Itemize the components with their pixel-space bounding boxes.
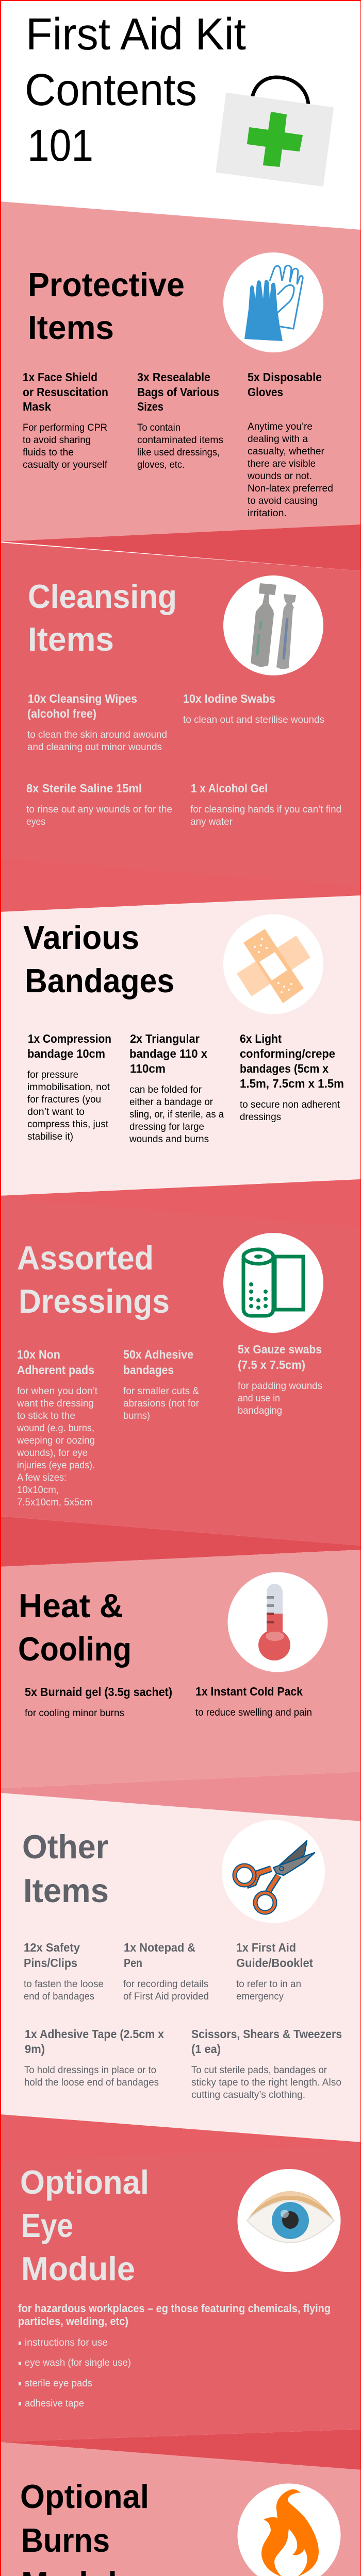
- heading: optional burns module: [20, 2478, 149, 2576]
- item: conforming bandages: 6x Light: [240, 1032, 282, 1045]
- item: face shield: fluids to the: [23, 447, 74, 458]
- list: eye module contents: instructions for use: [25, 2337, 108, 2348]
- item: notepad and pen: [123, 1941, 209, 2002]
- item: adhesive bandages: burns): [123, 1411, 150, 1421]
- heading: cleansing items: Cleansing: [28, 578, 177, 615]
- heading: other items: Items: [23, 1872, 109, 1909]
- item: alcohol gel: any water: [190, 817, 233, 827]
- item: notepad and pen: Pen: [124, 1956, 142, 1970]
- item: scissors, shears and tweezers: cutting casualty’s clothing.: [191, 2090, 305, 2100]
- item: triangular bandage: wounds and burns: [129, 1134, 209, 1145]
- heading: protective items: Protective: [28, 266, 185, 303]
- item: resealable bags: To contain: [137, 422, 180, 433]
- item: disposable gloves: casualty, whether: [248, 446, 325, 457]
- icon: flame: [237, 2483, 340, 2576]
- list: eye module contents: eye wash (for single use): [25, 2358, 131, 2368]
- item: burnaid gel: 5x Burnaid gel (3.5g sachet): [25, 1685, 172, 1699]
- item: non adherent pads: 7.5x10cm, 5x5cm: [17, 1497, 92, 1508]
- heading: other items: [22, 1828, 109, 1909]
- item: safety pins: [24, 1941, 104, 2002]
- heading: optional eye module: [20, 2163, 149, 2287]
- item: triangular bandage: dressing for large: [129, 1122, 204, 1132]
- item: sterile saline: eyes: [26, 817, 45, 827]
- item: alcohol gel: [190, 782, 341, 827]
- item: conforming bandages: [240, 1032, 344, 1123]
- panel: assorted dressings: [0, 1179, 361, 1567]
- item: adhesive bandages: bandages: [123, 1363, 174, 1377]
- intro: eye module: particles, welding, etc): [18, 2315, 128, 2328]
- item: compression bandage: bandage 10cm: [27, 1047, 105, 1060]
- item: disposable gloves: [247, 370, 333, 519]
- item: burnaid gel: [25, 1685, 172, 1719]
- item: sterile saline: [26, 782, 172, 827]
- heading: cleansing items: Items: [28, 620, 114, 658]
- item: compression bandage: for fractures (you: [27, 1094, 101, 1105]
- icon: scissors: [222, 1820, 325, 1923]
- item: non adherent pads: wound (e.g. burns,: [17, 1423, 94, 1434]
- item: non adherent pads: weeping or oozing: [17, 1435, 95, 1446]
- item: triangular bandage: 110cm: [130, 1062, 166, 1075]
- item: cleansing wipes: and cleaning out minor wounds: [27, 742, 162, 753]
- item: gauze swabs: for padding wounds: [238, 1381, 322, 1392]
- icon: eye: [237, 2169, 340, 2272]
- item: instant cold pack: 1x Instant Cold Pack: [195, 1685, 303, 1698]
- item: face shield: 1x Face Shield: [23, 370, 97, 384]
- heading: assorted dressings: Dressings: [19, 1282, 170, 1320]
- item: resealable bags: Sizes: [137, 400, 163, 413]
- item: compression bandage: compress this, just: [27, 1119, 109, 1130]
- item: notepad and pen: of First Aid provided: [123, 1991, 209, 2002]
- panel: optional eye module: [0, 2114, 361, 2470]
- icon: gloves: [223, 252, 323, 352]
- panel: protective items: [0, 201, 361, 571]
- panel: various bandages: [0, 895, 361, 1196]
- list: eye module contents: sterile eye pads: [25, 2378, 92, 2389]
- item: conforming bandages: bandages (5cm x: [240, 1062, 329, 1075]
- item: first aid guide: emergency: [236, 1991, 284, 2002]
- heading: various bandages: Bandages: [25, 962, 174, 999]
- heading: other items: Other: [22, 1828, 108, 1866]
- item: compression bandage: for pressure: [27, 1070, 78, 1080]
- item: non adherent pads: A few sizes:: [17, 1472, 67, 1483]
- panel: heat and cooling: [0, 1550, 361, 1821]
- intro: eye module: [18, 2302, 331, 2328]
- item: adhesive bandages: abrasions (not for: [123, 1398, 200, 1409]
- item: safety pins: end of bandages: [24, 1991, 94, 2002]
- icon: saline bottles: [223, 575, 323, 675]
- item: disposable gloves: Anytime you’re: [248, 421, 313, 432]
- item: cleansing wipes: (alcohol free): [27, 707, 96, 720]
- heading: heat and cooling: [18, 1587, 132, 1668]
- item: triangular bandage: 2x Triangular: [130, 1032, 200, 1045]
- item: first aid guide: Guide/Booklet: [236, 1956, 313, 1970]
- item: non adherent pads: injuries (eye pads).: [17, 1460, 95, 1471]
- item: adhesive bandages: for smaller cuts &: [123, 1386, 199, 1397]
- item: gauze swabs: [238, 1343, 322, 1416]
- item: non adherent pads: [17, 1348, 98, 1508]
- item: face shield: to avoid sharing: [23, 435, 91, 446]
- item: iodine swabs: to clean out and sterilise wounds: [183, 715, 324, 725]
- item: iodine swabs: 10x Iodine Swabs: [183, 692, 275, 705]
- item: gauze swabs: (7.5 x 7.5cm): [238, 1358, 305, 1371]
- icon: crossed plasters: [223, 914, 323, 1014]
- item: instant cold pack: [195, 1685, 312, 1718]
- item: first aid guide: to refer to in an: [236, 1979, 301, 1990]
- item: scissors, shears and tweezers: (1 ea): [191, 2042, 221, 2056]
- item: cleansing wipes: [27, 692, 167, 753]
- item: non adherent pads: wounds), for eye: [17, 1448, 88, 1459]
- item: safety pins: Pins/Clips: [24, 1956, 77, 1970]
- heading: assorted dressings: Assorted: [17, 1239, 154, 1277]
- item: non adherent pads: 10x10cm,: [17, 1485, 59, 1496]
- heading: assorted dressings: [17, 1239, 170, 1320]
- item: triangular bandage: [129, 1032, 224, 1145]
- item: face shield: [23, 370, 108, 470]
- panel: other items: [0, 1793, 361, 2142]
- item: cleansing wipes: 10x Cleansing Wipes: [28, 692, 137, 705]
- item: adhesive bandages: 50x Adhesive: [123, 1348, 193, 1361]
- item: adhesive bandages: [123, 1348, 200, 1421]
- item: burnaid gel: for cooling minor burns: [25, 1708, 124, 1719]
- item: cleansing wipes: to clean the skin around awound: [27, 730, 167, 740]
- item: compression bandage: don’t want to: [27, 1107, 85, 1117]
- item: adhesive tape: To hold dressings in place or to: [24, 2065, 156, 2076]
- item: disposable gloves: to avoid causing: [248, 496, 318, 506]
- item: face shield: casualty or yourself: [23, 460, 108, 470]
- item: disposable gloves: Gloves: [248, 385, 283, 399]
- heading: heat and cooling: Heat &: [19, 1587, 123, 1624]
- list: eye module contents: [19, 2337, 131, 2409]
- item: iodine swabs: [183, 692, 324, 725]
- heading: optional eye module: Optional: [20, 2163, 149, 2201]
- item: face shield: For performing CPR: [23, 422, 107, 433]
- heading: heat and cooling: Cooling: [18, 1630, 132, 1668]
- item: alcohol gel: 1 x Alcohol Gel: [191, 782, 268, 795]
- icon: first aid kit: [217, 77, 333, 185]
- item: compression bandage: 1x Compression: [28, 1032, 111, 1045]
- item: disposable gloves: there are visible: [248, 459, 316, 469]
- item: resealable bags: [137, 370, 223, 470]
- panel: cleansing items: [0, 543, 361, 912]
- item: resealable bags: like used dressings,: [137, 447, 220, 458]
- heading: optional eye module: Eye: [21, 2207, 73, 2244]
- item: triangular bandage: can be folded for: [129, 1084, 202, 1095]
- heading: various bandages: [23, 919, 174, 999]
- title: [25, 9, 246, 171]
- item: safety pins: to fasten the loose: [24, 1979, 104, 1990]
- item: compression bandage: [27, 1032, 111, 1142]
- item: disposable gloves: dealing with a: [248, 434, 308, 445]
- item: disposable gloves: Non-latex preferred: [248, 483, 333, 494]
- item: safety pins: 12x Safety: [24, 1941, 80, 1954]
- icon: dressing roll: [223, 1233, 323, 1333]
- item: triangular bandage: either a bandage or: [129, 1097, 214, 1108]
- heading: various bandages: Various: [23, 919, 139, 956]
- item: scissors, shears and tweezers: To cut sterile pads, bandages or: [191, 2065, 327, 2076]
- heading: optional burns module: Burns: [21, 2521, 110, 2559]
- icon: thermometer: [228, 1572, 328, 1672]
- list: eye module contents: adhesive tape: [25, 2398, 84, 2409]
- item: compression bandage: stabilise it): [27, 1131, 73, 1142]
- item: conforming bandages: 1.5m, 7.5cm x 1.5m: [240, 1077, 344, 1090]
- item: conforming bandages: dressings: [240, 1112, 281, 1123]
- item: face shield: or Resuscitation: [23, 385, 108, 399]
- item: triangular bandage: sling, or, if sterile, as a: [129, 1109, 224, 1120]
- item: instant cold pack: to reduce swelling and pain: [195, 1707, 312, 1718]
- item: disposable gloves: wounds or not.: [247, 471, 312, 482]
- panel: title: [25, 9, 333, 185]
- item: first aid guide: [236, 1941, 313, 2002]
- item: gauze swabs: bandaging: [238, 1405, 282, 1416]
- item: scissors, shears and tweezers: sticky tape to the right length. Also: [191, 2077, 341, 2088]
- title: 101: [27, 121, 93, 171]
- item: adhesive tape: 9m): [25, 2042, 45, 2056]
- item: non adherent pads: Adherent pads: [17, 1363, 94, 1377]
- item: conforming bandages: conforming/crepe: [240, 1047, 335, 1060]
- item: adhesive tape: 1x Adhesive Tape (2.5cm x: [25, 2027, 164, 2041]
- item: resealable bags: Bags of Various: [137, 385, 219, 399]
- item: sterile saline: to rinse out any wounds or for the: [26, 804, 172, 815]
- item: adhesive tape: hold the loose end of bandages: [24, 2077, 159, 2088]
- item: sterile saline: 8x Sterile Saline 15ml: [26, 782, 142, 795]
- item: resealable bags: 3x Resealable: [137, 370, 210, 384]
- title: First Aid Kit: [26, 9, 246, 59]
- intro: eye module: for hazardous workplaces – eg those featuring chemicals, flying: [18, 2302, 331, 2315]
- item: non adherent pads: for when you don’t: [17, 1386, 98, 1397]
- item: resealable bags: contaminated items: [137, 435, 223, 446]
- item: triangular bandage: bandage 110 x: [129, 1047, 207, 1060]
- item: non adherent pads: want the dressing: [17, 1398, 94, 1409]
- item: compression bandage: immobilisation, not: [27, 1082, 110, 1093]
- item: first aid guide: 1x First Aid: [236, 1941, 296, 1954]
- item: notepad and pen: for recording details: [123, 1979, 208, 1990]
- heading: cleansing items: [28, 578, 177, 658]
- item: scissors, shears and tweezers: Scissors, Shears & Tweezers: [191, 2027, 342, 2041]
- heading: optional eye module: Module: [21, 2250, 135, 2287]
- item: disposable gloves: irritation.: [248, 508, 287, 519]
- item: alcohol gel: for cleansing hands if you can’t find: [190, 804, 341, 815]
- item: non adherent pads: to stick to the: [17, 1411, 75, 1421]
- item: conforming bandages: to secure non adherent: [240, 1099, 340, 1110]
- item: gauze swabs: 5x Gauze swabs: [238, 1343, 322, 1356]
- heading: protective items: Items: [28, 309, 114, 346]
- item: gauze swabs: and use in: [238, 1393, 280, 1404]
- item: non adherent pads: 10x Non: [17, 1348, 60, 1361]
- item: disposable gloves: 5x Disposable: [248, 370, 322, 384]
- item: adhesive tape: [24, 2027, 164, 2088]
- item: face shield: Mask: [23, 400, 51, 413]
- panel: optional burns module: [0, 2442, 361, 2576]
- item: resealable bags: gloves, etc.: [137, 460, 185, 470]
- item: scissors, shears and tweezers: [191, 2027, 342, 2100]
- heading: protective items: [28, 266, 185, 346]
- heading: optional burns module: Optional: [20, 2478, 149, 2515]
- title: Contents: [25, 65, 197, 115]
- item: notepad and pen: 1x Notepad &: [124, 1941, 195, 1954]
